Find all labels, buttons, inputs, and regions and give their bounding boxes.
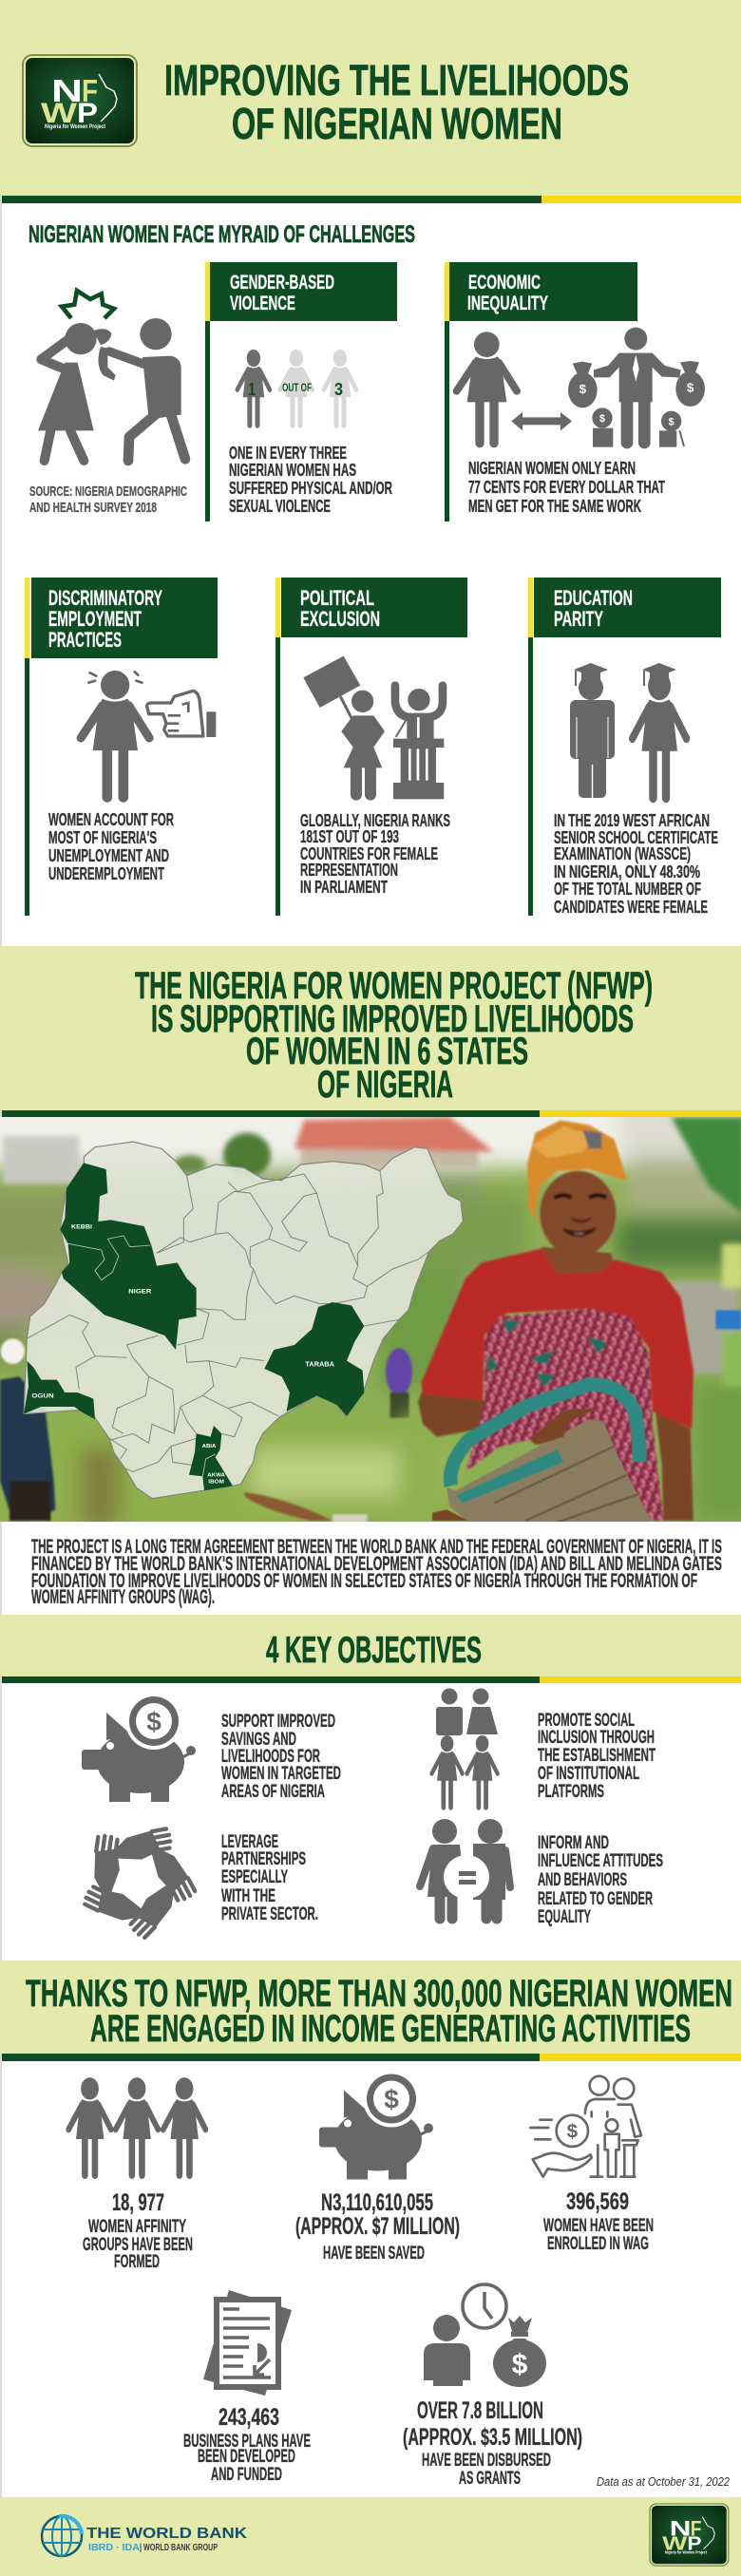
icon: woman and man with money: $ [687, 381, 694, 395]
icon: violence [38, 291, 185, 461]
objective: gender equality [420, 1819, 663, 1927]
logo: NFWP footer: P [687, 2532, 702, 2554]
state labels: AKWA [207, 1473, 225, 1479]
text: partnerships objective [221, 1832, 318, 1924]
text: employment stat: UNEMPLOYMENT AND [48, 846, 169, 865]
icon: woman equals man [420, 1819, 510, 1919]
icon: three women [68, 2077, 205, 2175]
icon: woman and man with money: $ [669, 416, 674, 427]
text: employment stat: WOMEN ACCOUNT FOR [48, 810, 174, 829]
source note: AND HEALTH SURVEY 2018 [29, 500, 157, 516]
panel: gender-based violence: GENDER-BASED [230, 272, 334, 294]
heading: challenges: NIGERIAN WOMEN FACE MYRAID OF CHALLENGES [28, 221, 415, 248]
text: violence stat [229, 444, 392, 516]
text: inequality stat: MEN GET FOR THE SAME WORK [468, 497, 641, 516]
objective: savings [82, 1693, 341, 1802]
text: inclusion objective: INCLUSION THROUGH [538, 1728, 655, 1748]
band: results heading [0, 1960, 741, 2061]
icon: woman and man with money [457, 328, 705, 447]
text: partnerships objective: WITH THE [221, 1886, 276, 1906]
panel: discriminatory employment: PRACTICES [48, 628, 122, 652]
text: affinity groups stat [83, 2189, 193, 2272]
logo: NFWP: F [82, 73, 98, 108]
icon: protester and speaker [303, 656, 444, 799]
text: inclusion objective: PLATFORMS [538, 1782, 604, 1802]
icon: family and money: $ [567, 2120, 579, 2142]
logo: NFWP footer: N [670, 2516, 691, 2540]
panel: education parity: EDUCATION [554, 586, 633, 610]
panel: economic inequality [445, 262, 705, 521]
text: education stat [554, 811, 718, 917]
text: affinity groups stat: GROUPS HAVE BEEN [83, 2235, 193, 2255]
text: inclusion objective [538, 1711, 656, 1802]
text: grants stat [403, 2397, 582, 2489]
panel: gender-based violence: VIOLENCE [230, 293, 295, 314]
icon: piggy bank [319, 2071, 433, 2179]
icon: woman and man with money: $ [580, 382, 587, 396]
text: project description: WOMEN AFFINITY GROUPS (WAG). [31, 1586, 215, 1608]
panel: education parity [528, 578, 721, 917]
state labels: ABIA [202, 1444, 216, 1449]
icon: one of three women [238, 350, 356, 426]
logo: NFWP: P [77, 98, 98, 129]
panel: economic inequality: ECONOMIC [468, 272, 541, 294]
text: political stat [300, 811, 450, 897]
text: inclusion objective: PROMOTE SOCIAL [538, 1711, 635, 1731]
text: business plans stat [183, 2404, 311, 2485]
logo: NFWP: Nigeria for Women Project [45, 124, 105, 130]
text: violence stat: SUFFERED PHYSICAL AND/OR [229, 479, 392, 498]
text: inequality stat [468, 459, 665, 516]
panel: discriminatory employment [25, 578, 218, 916]
panel: political exclusion: POLITICAL [300, 586, 374, 610]
text: business plans stat: 243,463 [218, 2404, 279, 2431]
text: inclusion objective: THE ESTABLISHMENT [538, 1746, 656, 1766]
logo: The World Bank [42, 2516, 248, 2556]
text: savings objective [221, 1712, 341, 1802]
text: grants stat: HAVE BEEN DISBURSED [422, 2451, 551, 2471]
state labels: TARABA [305, 1362, 334, 1369]
text: equality objective: AND BEHAVIORS [538, 1870, 627, 1890]
text: equality objective [538, 1833, 663, 1927]
icon: circle of hands [83, 1828, 197, 1940]
panel: political exclusion [276, 578, 467, 916]
stat: savings [295, 2071, 460, 2263]
text: project description [31, 1536, 722, 1608]
text: inequality stat: NIGERIAN WOMEN ONLY EARN [468, 459, 636, 478]
logo: The World Bank: | WORLD BANK GROUP [140, 2543, 218, 2553]
logo: NFWP footer: Nigeria for Women Project [665, 2549, 708, 2554]
state labels [31, 1224, 334, 1485]
stat: grants [403, 2284, 582, 2489]
text: affinity groups stat: FORMED [114, 2252, 160, 2272]
source note [29, 483, 187, 516]
logo: NFWP footer: W [662, 2532, 688, 2554]
text: savings objective: SUPPORT IMPROVED [221, 1712, 335, 1732]
text: enrolled stat: 396,569 [566, 2188, 629, 2215]
text: business plans stat: BEEN DEVELOPED [198, 2447, 295, 2467]
stat: affinity groups [68, 2077, 205, 2272]
text: partnerships objective: PARTNERSHIPS [221, 1849, 306, 1869]
text: grants stat: OVER 7.8 BILLION [417, 2397, 543, 2424]
source note: SOURCE: NIGERIA DEMOGRAPHIC [29, 483, 187, 500]
logo: NFWP: N [51, 73, 83, 108]
text: employment stat [48, 810, 174, 883]
icon: woman and man with money: $ [599, 413, 605, 425]
text: savings stat: (APPROX. $7 MILLION) [295, 2213, 460, 2240]
text: violence stat: NIGERIAN WOMEN HAS [229, 461, 356, 480]
text: business plans stat: BUSINESS PLANS HAVE [183, 2432, 311, 2452]
text: equality objective: INFORM AND [538, 1833, 609, 1853]
state labels: OGUN [31, 1392, 54, 1399]
header band [0, 0, 741, 203]
state labels: NIGER [128, 1288, 152, 1295]
icon: person, clock and money bag: $ [512, 2349, 528, 2380]
panel: political exclusion: EXCLUSION [300, 607, 380, 631]
icon: piggy bank [82, 1693, 196, 1802]
band: NFWP support heading: OF NIGERIA [317, 1064, 453, 1106]
text: political stat: IN PARLIAMENT [300, 878, 388, 897]
text: savings stat: HAVE BEEN SAVED [323, 2244, 425, 2263]
band: NFWP support heading: OF WOMEN IN 6 STATES [246, 1031, 528, 1072]
text: enrolled stat: WOMEN HAVE BEEN [543, 2216, 654, 2236]
footer band [0, 2497, 741, 2576]
logo: NFWP [23, 55, 137, 146]
text: inclusion objective: OF INSTITUTIONAL [538, 1764, 639, 1784]
text: business plans stat: AND FUNDED [211, 2465, 282, 2485]
objective: social inclusion [431, 1689, 656, 1808]
icon: family and money [530, 2076, 641, 2177]
text: violence stat: ONE IN EVERY THREE [229, 444, 347, 463]
title: OF NIGERIAN WOMEN [232, 99, 562, 148]
icon: one of three women: 3 [334, 380, 343, 399]
text: savings objective: SAVINGS AND [221, 1730, 296, 1750]
text: equality objective: EQUALITY [538, 1907, 591, 1927]
text: employment stat: MOST OF NIGERIA'S [48, 828, 157, 847]
icon: one of three women: 1 [248, 380, 256, 399]
icon: piggy bank: $ [146, 1707, 162, 1736]
text: enrolled stat [543, 2188, 654, 2254]
text: equality objective: RELATED TO GENDER [538, 1889, 653, 1909]
logo: The World Bank: THE WORLD BANK [86, 2526, 248, 2542]
icon: piggy bank: $ [384, 2084, 399, 2114]
text: political stat: 181ST OUT OF 193 [300, 827, 399, 846]
logo: The World Bank: IBRD · IDA [88, 2543, 140, 2553]
band: 4 key objectives [0, 1615, 741, 1683]
logo: NFWP: W [41, 98, 78, 129]
objective: partnerships [83, 1828, 318, 1940]
text: savings stat: N3,110,610,055 [321, 2189, 433, 2216]
text: savings stat [295, 2189, 460, 2263]
icon: person, clock and money bag [424, 2284, 546, 2387]
text: violence stat: SEXUAL VIOLENCE [229, 497, 331, 516]
text: partnerships objective: PRIVATE SECTOR. [221, 1904, 318, 1924]
icon: woman and pointing hand [81, 671, 216, 797]
text: grants stat: (APPROX. $3.5 MILLION) [403, 2424, 582, 2451]
map: Nigeria with six highlighted states [24, 1142, 463, 1499]
state labels: IBOM [208, 1479, 225, 1485]
stat: business plans [183, 2290, 311, 2485]
text: equality objective: INFLUENCE ATTITUDES [538, 1851, 663, 1871]
panel: gender-based violence [205, 262, 397, 521]
band: NFWP support heading [0, 946, 741, 1117]
text: savings objective: WOMEN IN TARGETED [221, 1764, 341, 1784]
title [164, 56, 629, 148]
icon: documents [203, 2290, 292, 2396]
text: partnerships objective: LEVERAGE [221, 1832, 278, 1852]
logo: NFWP footer: F [691, 2516, 702, 2540]
text: political stat: GLOBALLY, NIGERIA RANKS [300, 811, 450, 830]
text: affinity groups stat: 18, 977 [112, 2189, 164, 2216]
text: enrolled stat: ENROLLED IN WAG [547, 2234, 649, 2254]
icon: graduates [570, 663, 687, 798]
panel: education parity: PARITY [554, 607, 603, 631]
photo: woman farmer with watering can [0, 1117, 741, 1522]
band: 4 key objectives: 4 KEY OBJECTIVES [266, 1630, 482, 1671]
text: employment stat: UNDEREMPLOYMENT [48, 864, 164, 883]
text: grants stat: AS GRANTS [459, 2469, 521, 2489]
text: savings objective: LIVELIHOODS FOR [221, 1747, 320, 1767]
logo: NFWP footer [650, 2504, 729, 2566]
text: savings objective: AREAS OF NIGERIA [221, 1782, 325, 1802]
panel: discriminatory employment: EMPLOYMENT [48, 607, 142, 631]
text: political stat: COUNTRIES FOR FEMALE [300, 844, 438, 863]
icon: one of three women: OUT OF [282, 381, 312, 394]
panel: economic inequality: INEQUALITY [467, 293, 548, 314]
stat: enrolled [530, 2076, 654, 2254]
icon: four people [431, 1689, 498, 1808]
text: partnerships objective: ESPECIALLY [221, 1867, 288, 1887]
panel: discriminatory employment: DISCRIMINATORY [48, 586, 162, 610]
text: political stat: REPRESENTATION [300, 861, 398, 880]
state labels: KEBBI [71, 1224, 92, 1231]
text: affinity groups stat: WOMEN AFFINITY [88, 2217, 186, 2237]
